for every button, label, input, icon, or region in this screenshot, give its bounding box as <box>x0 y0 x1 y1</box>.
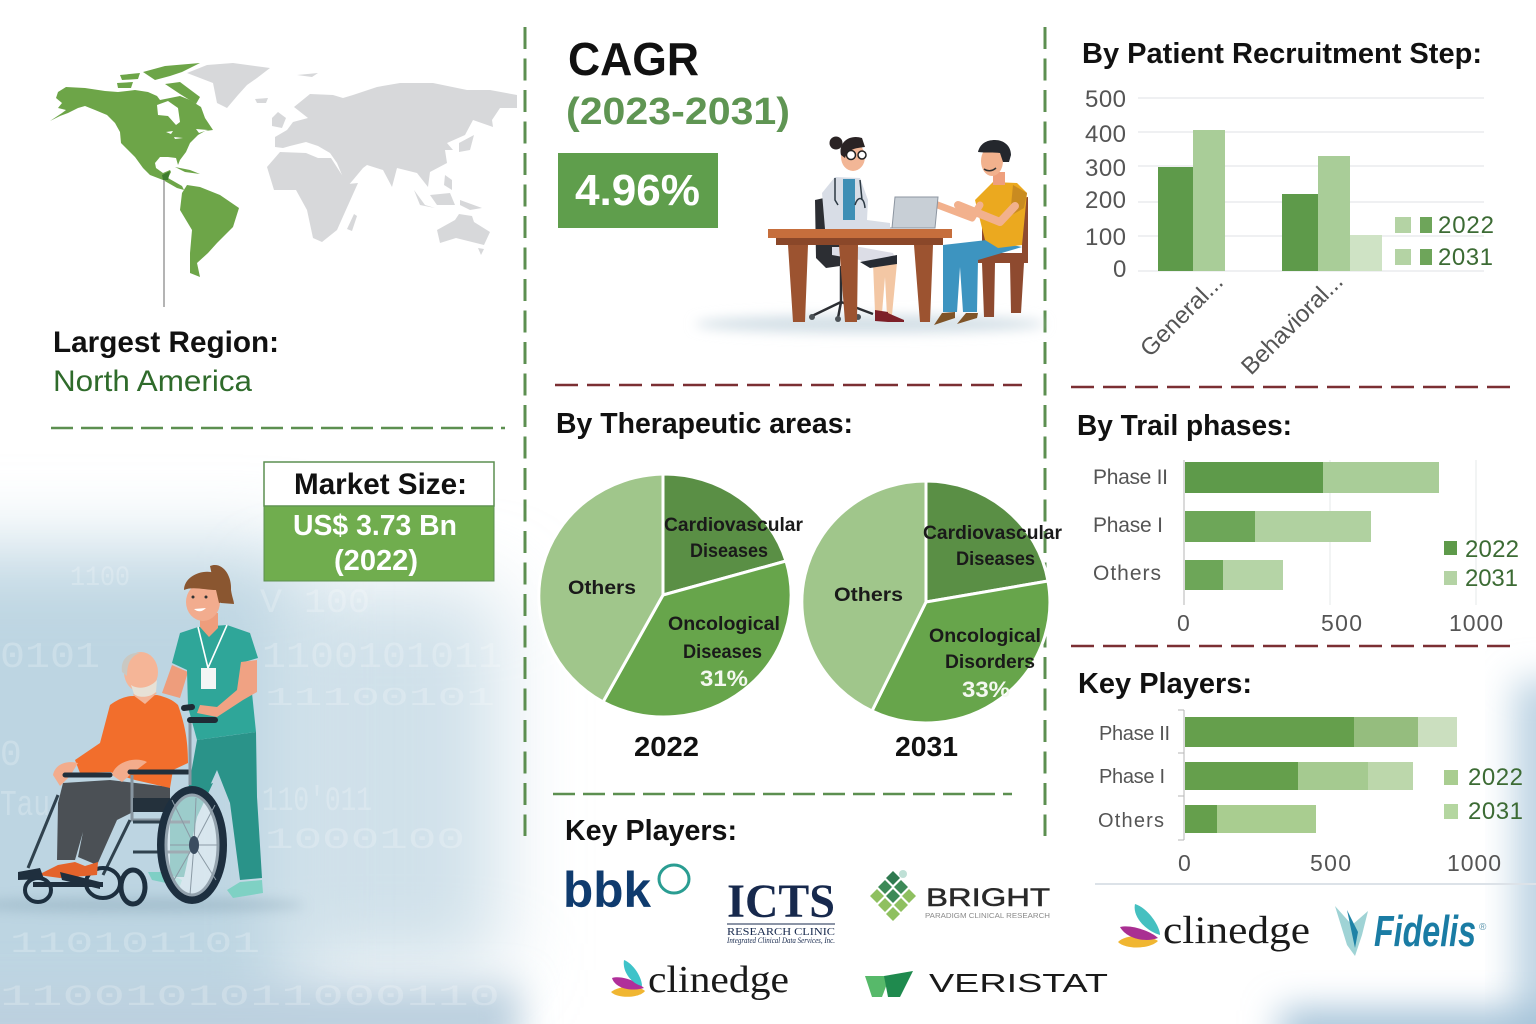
legend <box>1444 764 1523 825</box>
pie 2031 labels: Disorders <box>945 652 1035 673</box>
axis: 0 <box>1177 610 1190 636</box>
illustration: nurse and patient in wheelchair <box>0 565 305 912</box>
heading: By Therapeutic areas: <box>556 408 853 440</box>
market size box: (2022) <box>334 545 418 577</box>
pie 2022 labels: 2022 <box>634 731 699 762</box>
row labels: Phase II <box>1093 466 1168 489</box>
binary pattern: 11100101 <box>265 683 495 713</box>
legend <box>1444 536 1519 592</box>
doctor <box>822 136 904 322</box>
logo: clinedge centre: clinedge <box>648 959 789 1001</box>
man <box>53 652 188 865</box>
logo: bbk: bbk <box>563 862 651 918</box>
binary pattern: 1100 <box>70 563 130 594</box>
axis: 500 <box>1310 850 1351 876</box>
axis <box>1177 460 1503 636</box>
illustration: doctor and patient at desk <box>695 136 1045 333</box>
binary pattern: Tau <box>0 785 50 826</box>
logo: clinedge right: clinedge <box>1163 909 1310 952</box>
legend: 2022 <box>1468 764 1523 791</box>
footrests and shoes <box>18 862 103 889</box>
patient chair <box>978 197 1028 317</box>
legend: 2031 <box>1468 798 1523 825</box>
heading: Key Players: <box>1078 668 1252 700</box>
logo: VERISTAT <box>865 968 1108 998</box>
logo: Fidelis: ® <box>1479 922 1487 933</box>
logo: ICTS: Integrated Clinical Data Services, Inc. <box>726 936 835 945</box>
binary pattern: 1100101011 <box>262 637 502 678</box>
desk <box>768 229 952 322</box>
category labels: General... <box>1135 269 1229 362</box>
logo: BRIGHT <box>870 870 1050 921</box>
row labels: Phase I <box>1093 514 1163 537</box>
legend: 2031 <box>1438 244 1493 271</box>
binary pattern: 1000100 <box>265 824 465 858</box>
CAGR heading: CAGR <box>568 33 699 85</box>
row labels: Others <box>1093 562 1161 585</box>
largest region text: North America <box>53 365 252 398</box>
stacked bars <box>1185 717 1457 833</box>
category labels: Behavioral... <box>1236 268 1349 380</box>
binary pattern: 110101101 <box>10 928 260 962</box>
wheelchair <box>25 707 223 904</box>
map: rest of world <box>187 63 517 255</box>
pie 2022 labels: Diseases <box>690 541 768 562</box>
logo: clinedge right <box>1118 904 1310 952</box>
pie 2031 <box>802 481 1050 723</box>
pie 2031 labels: Oncological <box>929 626 1041 647</box>
pie 2031 labels: 2031 <box>895 731 958 762</box>
axis: 500 <box>1321 610 1362 636</box>
axis <box>1178 710 1501 876</box>
pie 2031 labels: 33% <box>962 677 1010 702</box>
row labels: Others <box>1098 810 1164 832</box>
world map <box>50 63 517 307</box>
panel: key players chart <box>1078 668 1523 876</box>
logo: ICTS: ICTS <box>727 875 835 928</box>
gridlines and axis labels: 200 <box>1085 187 1126 214</box>
axis: 1000 <box>1449 610 1503 636</box>
pie 2022 labels: Oncological <box>668 614 780 635</box>
market size box: Market Size: <box>294 468 467 501</box>
key players heading: Key Players: <box>565 815 737 847</box>
row labels <box>1093 466 1168 585</box>
panel: trial phases chart <box>1077 410 1519 636</box>
bars <box>1185 462 1439 590</box>
pie 2031 labels: Cardiovascular <box>923 523 1063 544</box>
row labels: Phase II <box>1099 723 1170 745</box>
market size box: US$ 3.73 Bn <box>293 510 457 542</box>
pie 2022 labels: Others <box>568 578 636 599</box>
legend: 2022 <box>1465 536 1519 563</box>
pie 2022 labels: Cardiovascular <box>664 515 804 536</box>
map: water cut-outs <box>157 101 208 139</box>
binary pattern: 110'011 <box>262 783 372 821</box>
gridlines and axis labels: 500 <box>1085 86 1126 113</box>
map pin line <box>163 180 165 307</box>
nurse <box>148 565 263 898</box>
logo: Fidelis: Fidelis <box>1374 907 1476 956</box>
logo: BRIGHT: BRIGHT <box>926 884 1050 912</box>
laptop <box>890 197 938 228</box>
heading: By Patient Recruitment Step: <box>1082 38 1482 70</box>
pie 2022 labels <box>568 515 804 762</box>
gridlines and axis labels: 0 <box>1113 256 1126 283</box>
largest region text: Largest Region: <box>53 326 279 359</box>
panel: patient recruitment step chart <box>1082 38 1494 380</box>
market size box <box>264 462 494 581</box>
gridlines and axis labels <box>1085 86 1484 283</box>
legend: 2022 <box>1438 212 1494 239</box>
row labels <box>1098 723 1170 832</box>
binary pattern: V 100 <box>260 585 370 623</box>
doctor chair <box>809 198 873 322</box>
CAGR value box <box>558 153 718 228</box>
logo: BRIGHT: PARADIGM CLINICAL RESEARCH <box>925 913 1050 920</box>
legend: 2031 <box>1465 565 1518 592</box>
legend <box>1395 212 1494 271</box>
gridlines and axis labels: 100 <box>1085 224 1126 251</box>
gridlines and axis labels: 300 <box>1085 155 1126 182</box>
row labels: Phase I <box>1099 766 1165 788</box>
pie 2022 labels: Diseases <box>683 642 762 663</box>
pie 2022 <box>539 474 791 717</box>
panel: therapeutic areas <box>539 408 1063 762</box>
pie 2031 labels <box>834 523 1063 762</box>
category labels <box>1135 268 1349 380</box>
CAGR heading: (2023-2031) <box>566 91 790 133</box>
pie 2031 labels: Others <box>834 585 903 606</box>
CAGR value box: 4.96% <box>575 166 700 215</box>
patient <box>934 140 1027 325</box>
CAGR heading <box>566 33 790 133</box>
largest region text <box>53 326 279 398</box>
binary pattern: 0 <box>0 735 22 776</box>
binary pattern: 1100101011000110 <box>0 981 500 1015</box>
map: Americas highlighted <box>50 63 239 277</box>
gridlines and axis labels: 400 <box>1085 121 1126 148</box>
binary pattern <box>0 563 502 1015</box>
logo: VERISTAT: VERISTAT <box>929 968 1108 998</box>
pie 2031 labels: Diseases <box>956 549 1035 570</box>
axis: 0 <box>1178 850 1191 876</box>
bars <box>1158 130 1382 271</box>
logo: ICTS: RESEARCH CLINIC <box>727 926 835 938</box>
heading: By Trail phases: <box>1077 410 1292 442</box>
axis: 1000 <box>1447 850 1501 876</box>
pie 2022 labels: 31% <box>700 666 748 691</box>
binary pattern: 0101 <box>0 637 100 678</box>
logo: Fidelis <box>1335 906 1487 956</box>
